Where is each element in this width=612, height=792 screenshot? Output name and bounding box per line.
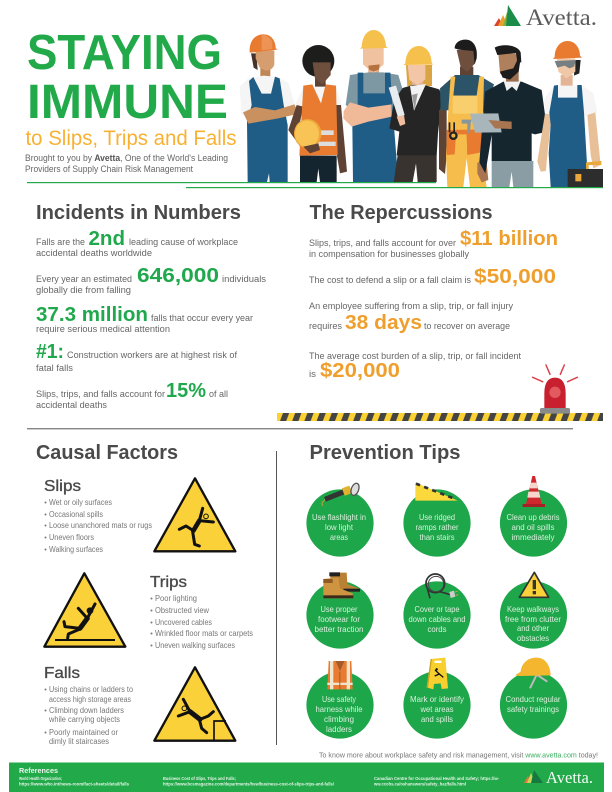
trips text: Obstructed view [155, 606, 209, 615]
header rules [27, 182, 603, 188]
tip: ramps: than stairs [420, 532, 454, 542]
falls text: Using chains or ladders to [49, 685, 133, 694]
falls text: access high storage areas [49, 695, 131, 704]
section divider [27, 428, 573, 429]
footer logo: Avetta. [546, 768, 593, 787]
tip: cables: down cables and [408, 614, 466, 624]
stat: 2nd: accidental deaths worldwide [36, 248, 152, 258]
call to action: To know more about workplace safety and risk management, visit www.avetta.com today! [319, 750, 598, 760]
tip: trainings: Conduct regular [506, 694, 561, 704]
footer panel [9, 762, 604, 792]
tip: ramps [403, 482, 471, 557]
stat: 646,000: Every year an estimated [36, 274, 132, 284]
stat: $11 billion: $11 billion [460, 227, 558, 250]
tip: footwear: Use proper [320, 604, 358, 614]
reference 1: https://www.who.int/news-room/fact-sheets/detail/falls [19, 782, 129, 787]
reference 2: https://www.bcsmagazine.com/departments/hsw/business-cost-of-slips-trips-and-falls/ [163, 782, 335, 787]
stat: 2nd [36, 227, 238, 258]
tip: walkways: and other [517, 623, 549, 633]
tip: walkways: Keep walkways [507, 604, 559, 614]
reference 1 [19, 776, 129, 787]
worker 5: yellow overalls with tool belt [439, 40, 494, 187]
stat: 38 days: to recover on average [424, 321, 510, 331]
worker 1: orange helmet, blue overalls [240, 34, 299, 182]
slips text: Occasional spills [49, 510, 103, 519]
trips text: Poor lighting [155, 594, 197, 603]
worker 3: yellow helmet, beard, blue overalls [343, 30, 402, 182]
falls text [44, 665, 133, 746]
stat: #1: Construction workers are at highest risk of [67, 350, 237, 360]
stat: 15%: 15% [166, 379, 206, 402]
tip: walkways [500, 572, 567, 649]
hazard stripe [277, 413, 603, 421]
byline [25, 153, 228, 174]
panel: the repercussions [277, 202, 603, 421]
stat: 37.3 million [36, 303, 253, 334]
stat: 646,000 [36, 264, 267, 295]
icon: fall warning triangle [154, 667, 235, 741]
tip: flashlight [306, 482, 374, 557]
header panel [25, 5, 603, 188]
tip: clean up: and oil spills [512, 522, 554, 532]
stat: $50,000: $50,000 [474, 265, 556, 288]
stat: 15%: of all [209, 389, 228, 399]
tip: clean up: Clean up debris [506, 512, 560, 522]
icon: red siren [533, 365, 577, 414]
stat: $11 billion: Slips, trips, and falls account for over [309, 238, 456, 248]
tip: wet areas: Mark or identify [410, 694, 465, 704]
trips text: Wrinkled floor mats or carpets [155, 629, 253, 638]
falls text: Climbing down ladders [49, 706, 124, 715]
logo: Avetta [494, 5, 597, 30]
tip: trainings [500, 658, 567, 739]
tip: flashlight: Use flashlight in [312, 512, 366, 522]
byline: Brought to you by Avetta, One of the World's Leading [25, 153, 228, 163]
stat: $20,000: $20,000 [320, 359, 400, 382]
falls text: while carrying objects [48, 715, 120, 724]
stat: $11 billion [309, 227, 558, 259]
tip: wet areas: and spills [421, 714, 453, 724]
stat: $11 billion: in compensation for businesses globally [309, 249, 469, 259]
stat: #1: fatal falls [36, 363, 74, 373]
stat: 646,000: individuals [222, 274, 267, 284]
stat: #1: #1: [36, 340, 64, 363]
stat: $20,000: The average cost burden of a slip, trip, or fall incident [309, 351, 521, 361]
tip: ramps: ramps rather [416, 522, 459, 532]
stat: $50,000 [309, 265, 556, 288]
tip: clean up: immediately [512, 532, 555, 542]
panel: prevention tips [306, 442, 567, 739]
falls text: Poorly maintained or [49, 728, 118, 737]
tip: walkways: obstacles [517, 633, 549, 643]
tip: wet areas: wet areas [420, 704, 454, 714]
stat: 38 days: An employee suffering from a slip, trip, or fall injury [309, 301, 514, 311]
stat: 37.3 million: 37.3 million [36, 303, 148, 326]
subtitle: to Slips, Trips and Falls [26, 127, 236, 150]
stat: $20,000 [309, 351, 521, 382]
illustration: group of workers [240, 30, 603, 187]
tip: cables: Cover or tape [414, 604, 460, 614]
icon: slip warning triangle [154, 478, 235, 551]
panel: incidents in numbers [36, 202, 267, 410]
heading: prevention tips: Prevention Tips [310, 442, 460, 464]
column divider [276, 451, 277, 745]
stat: 38 days: requires [309, 321, 343, 331]
stat: 15%: accidental deaths [36, 400, 107, 410]
falls text: dimly lit staircases [49, 737, 109, 746]
reference 2: Business Cost of Slips, Trips and Falls; [163, 776, 236, 781]
stat: 37.3 million: falls that occur every year [151, 313, 253, 323]
heading: repercussions: The Repercussions [310, 202, 492, 224]
tip: cables: cords [428, 624, 446, 634]
slips text [44, 478, 152, 554]
stat: 15%: Slips, trips, and falls account for [36, 389, 165, 399]
panel: causal factors [36, 442, 253, 746]
title [27, 26, 228, 129]
worker 4: woman in black suit with blueprint [389, 46, 442, 182]
icon: trip warning triangle [44, 573, 125, 647]
tip: walkways: free from clutter [505, 614, 561, 624]
stat: $20,000: is [309, 369, 317, 379]
trips text: Trips [150, 574, 187, 591]
stat: 15% [36, 379, 228, 410]
worker 7: woman with goggles and toolbox [537, 41, 603, 187]
stat: 646,000: 646,000 [137, 264, 219, 287]
footer logo [524, 768, 593, 787]
title: STAYING [27, 26, 222, 80]
trips text: Uncovered cables [155, 618, 212, 627]
heading: incidents: Incidents in Numbers [36, 202, 241, 224]
tip: safety harness: harness while [316, 704, 363, 714]
reference 3: Canadian Centre for Occupational Health and Safety; https://w- [374, 776, 499, 781]
slips text: Loose unanchored mats or rugs [49, 521, 152, 530]
tip: clean up [500, 476, 567, 557]
slips text: Walking surfaces [49, 545, 103, 554]
heading: causal factors: Causal Factors [36, 442, 178, 464]
tip: wet areas [403, 658, 471, 739]
tip: safety harness: climbing [324, 714, 354, 724]
stat: 2nd: 2nd [88, 227, 125, 250]
slips text: Uneven floors [49, 533, 94, 542]
slips text: Wet or oily surfaces [49, 498, 112, 507]
reference 3 [373, 776, 499, 787]
tip: safety harness: Use safety [322, 694, 357, 704]
stat: 646,000: globally die from falling [36, 285, 131, 295]
falls text: Falls [44, 665, 80, 682]
reference 1: World Health Organization; [19, 776, 62, 781]
title: IMMUNE [27, 76, 228, 129]
tip: trainings: safety trainings [507, 704, 559, 714]
tip: safety harness: ladders [326, 724, 352, 734]
tip: cables [403, 574, 471, 649]
byline: Providers of Supply Chain Risk Management [25, 164, 193, 174]
stat: #1 [36, 340, 237, 373]
reference 3: ww.ccohs.ca/oshanswers/safety_haz/falls.html [373, 782, 466, 787]
worker 2: afro, orange vest, holding helmet [288, 45, 347, 182]
tip: ramps: Use ridged [419, 512, 455, 522]
tip: footwear: better traction [314, 624, 364, 634]
stat: 2nd: leading cause of workplace [129, 237, 238, 247]
stat: $50,000: The cost to defend a slip or a fall claim is [309, 275, 471, 285]
tip: footwear [306, 572, 374, 649]
trips text: Uneven walking surfaces [155, 641, 235, 650]
trips text [150, 574, 253, 650]
stat: 38 days: 38 days [345, 311, 422, 334]
stat: 37.3 million: require serious medical attention [36, 324, 170, 334]
tip: footwear: footwear for [318, 614, 360, 624]
tip: safety harness [306, 661, 374, 739]
slips text: Slips [44, 478, 81, 495]
logo: Avetta: Avetta. [526, 5, 597, 30]
tip: flashlight: areas [330, 532, 348, 542]
reference 2 [163, 776, 335, 787]
worker 6: navy sweater with tablet [470, 45, 547, 187]
stat: 2nd: Falls are the [36, 237, 85, 247]
stat: 38 days [309, 301, 514, 334]
references heading: References [19, 766, 58, 775]
tip: flashlight: low light [325, 522, 354, 532]
